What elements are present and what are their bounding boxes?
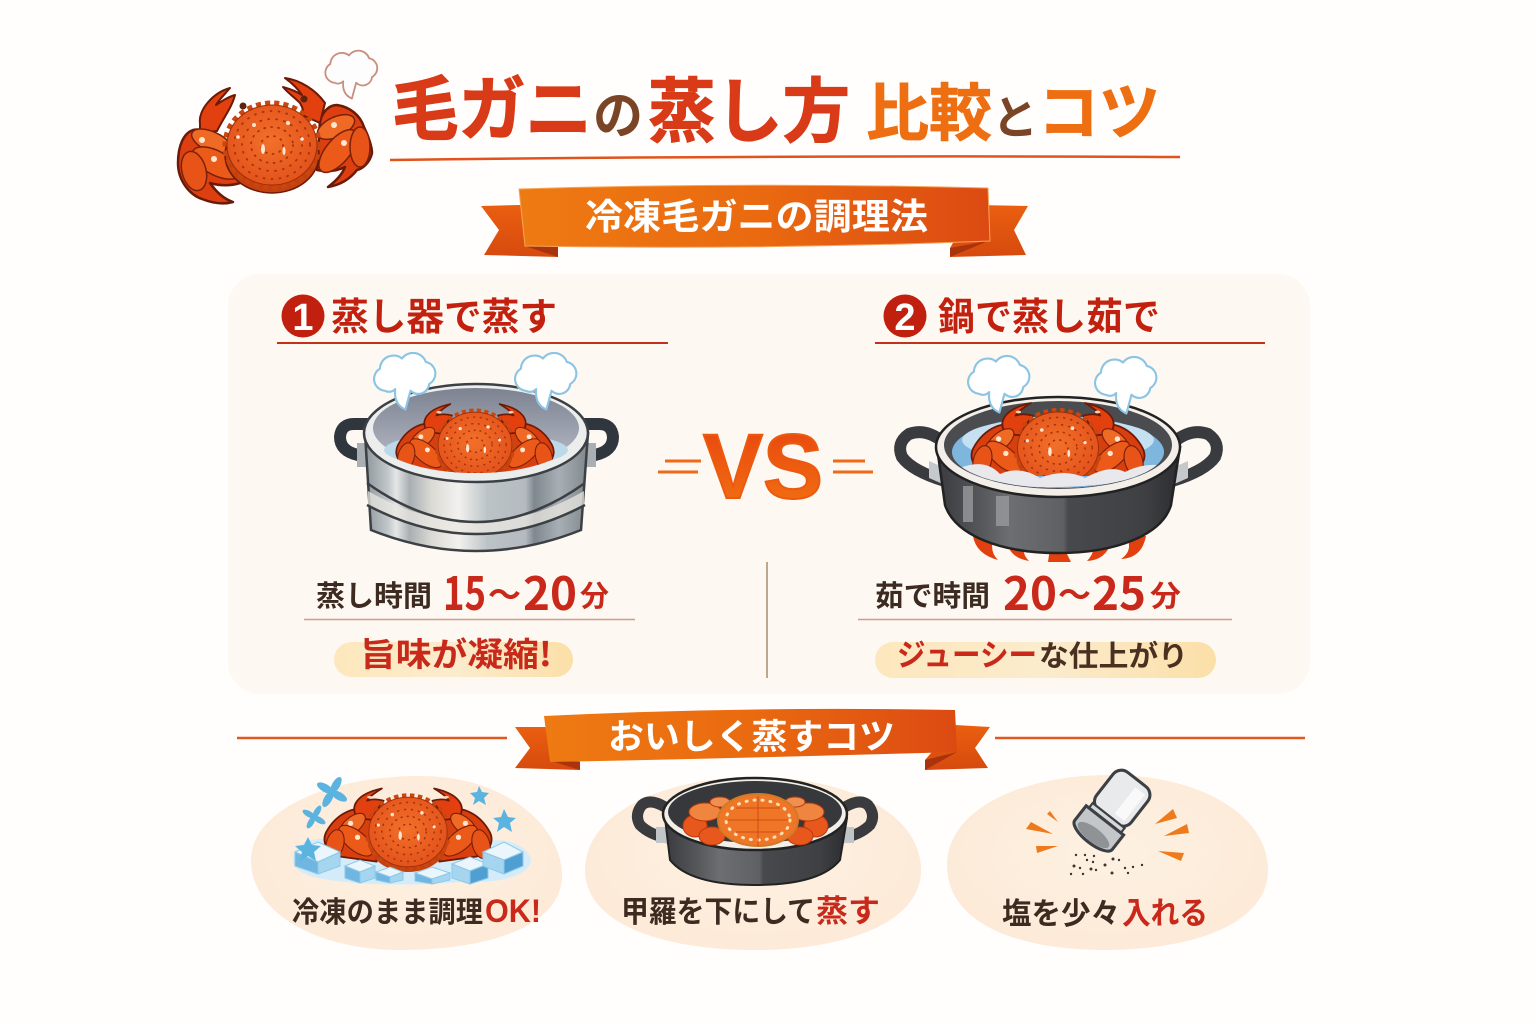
panel: tip 3 add salt — [947, 765, 1268, 950]
heading: method 1 — [277, 286, 668, 343]
tip text: 冷凍のまま調理 — [292, 889, 483, 931]
heading: method 2 — [875, 286, 1265, 343]
title text: コツ — [1038, 62, 1160, 152]
heading: method 2: 2 — [894, 297, 916, 339]
icon: hairy crab with steam — [177, 51, 377, 203]
title text: の — [593, 74, 643, 149]
stat: steaming time: 20 — [523, 558, 577, 624]
title text: と — [992, 82, 1038, 148]
stat: steaming time: 蒸し時間 — [316, 573, 432, 615]
panel: tip 1 frozen cooking — [251, 769, 562, 950]
callout: juicy finish: な仕上がり — [1039, 633, 1188, 675]
ribbon: frozen crab cooking method — [481, 185, 1028, 257]
callout: flavor concentrated: 旨味が凝縮! — [360, 628, 552, 676]
icon: crab on ice — [293, 769, 531, 884]
illustration: steamer pot with crab — [340, 353, 613, 551]
callout: juicy finish — [875, 630, 1216, 678]
stat: steaming time — [304, 558, 635, 624]
stat: steaming time: 分 — [580, 573, 609, 615]
section header: tips ribbon: おいしく蒸すコツ — [608, 709, 895, 760]
icon: pan with crab shell down — [637, 778, 873, 885]
stat: steaming time: 15 — [443, 558, 486, 624]
stat: boiling time: 〜 — [1058, 570, 1091, 616]
stat: boiling time: 25 — [1092, 558, 1146, 624]
tip text: 甲羅を下にして — [621, 887, 815, 931]
ribbon: frozen crab cooking method: 冷凍毛ガニの調理法 — [585, 188, 928, 240]
panel: tip 2 shell side down — [585, 777, 921, 950]
title text: 蒸し方 — [648, 56, 850, 157]
heading: method 2: 鍋で蒸し茹で — [938, 286, 1160, 341]
section header: tips ribbon — [237, 709, 1305, 770]
stat: boiling time: 20 — [1003, 558, 1057, 624]
stat: boiling time: 茹で時間 — [875, 573, 990, 615]
heading: method 1: 1 — [292, 297, 314, 339]
title block — [177, 51, 1180, 203]
illustration: pot with crab over flames — [900, 356, 1217, 562]
title text: 毛ガニ — [392, 54, 592, 155]
VS mark — [658, 416, 873, 518]
tip text — [1002, 888, 1208, 933]
panel: steaming comparison — [228, 274, 1310, 694]
stat: boiling time — [858, 558, 1232, 624]
VS mark: VS — [703, 416, 823, 518]
tip text: 塩を少々 — [1002, 889, 1120, 933]
heading: method 1: 蒸し器で蒸す — [331, 286, 557, 341]
stat: boiling time: 分 — [1150, 573, 1181, 615]
title text: 比較 — [866, 63, 992, 153]
callout: juicy finish: ジューシー — [897, 630, 1037, 675]
divider — [766, 562, 768, 678]
tip text: 蒸す — [816, 886, 880, 931]
stat: steaming time: 〜 — [488, 570, 521, 616]
title underline — [390, 156, 1180, 160]
tip text: 入れる — [1122, 888, 1208, 933]
tip text: OK! — [485, 893, 541, 929]
icon: salt shaker — [1026, 765, 1189, 875]
title text — [392, 54, 1160, 157]
